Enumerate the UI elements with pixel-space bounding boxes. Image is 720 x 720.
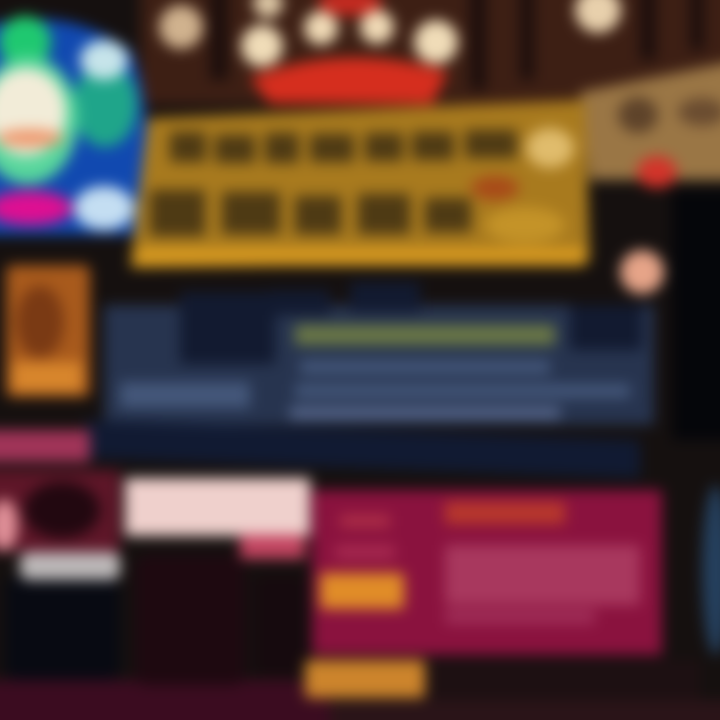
text block: crimson lines <box>335 502 640 624</box>
button: orange <box>320 573 404 609</box>
panel: pink and white card <box>0 430 310 559</box>
title text blur <box>150 130 517 236</box>
icon: pink light <box>620 250 664 294</box>
panel: colourful wheel <box>0 16 146 235</box>
panel: crimson info card <box>312 490 662 655</box>
text block: board lines <box>120 360 630 419</box>
title: gold banner <box>130 100 590 268</box>
heading: green-gold text <box>295 325 555 345</box>
panel: dark seats <box>5 552 305 685</box>
icon: blue edge figure <box>702 485 720 655</box>
icon: red crown with lights <box>159 0 621 104</box>
panel: dark blue band <box>85 420 640 478</box>
panel: blue info board <box>104 282 654 425</box>
button: orange lower <box>305 660 425 698</box>
panel: tan right banner <box>580 58 720 188</box>
panel: orange card <box>6 265 90 397</box>
panel: dark right column <box>672 190 720 440</box>
